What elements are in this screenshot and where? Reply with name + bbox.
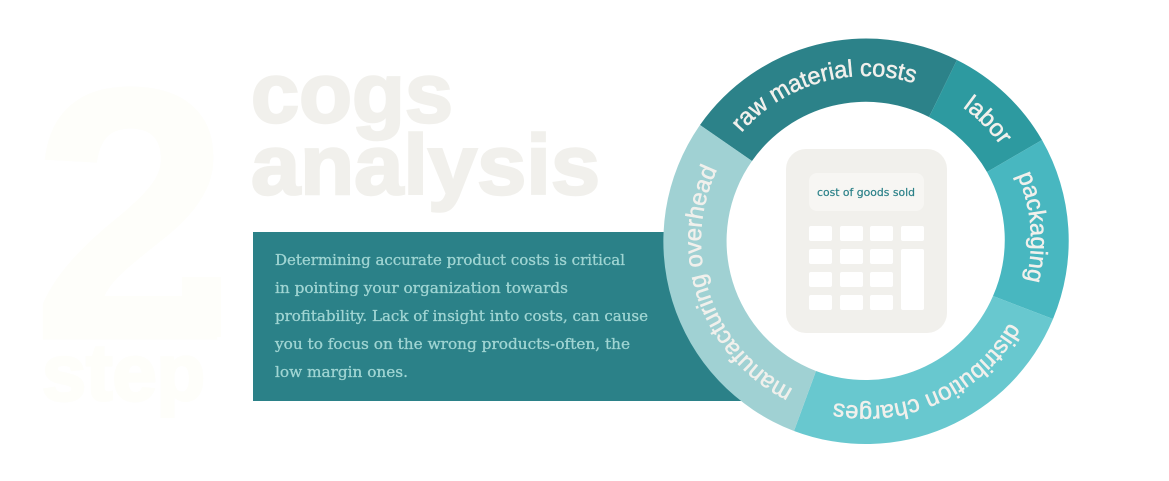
segment: labor <box>929 60 1042 172</box>
calculator keys <box>809 226 924 310</box>
description text: profitability. Lack of insight into costs, can cause <box>275 307 648 325</box>
step number watermark: 2 <box>32 14 230 414</box>
segment: distribution charges: distribution charges <box>833 324 1020 420</box>
segment: distribution charges <box>794 296 1053 444</box>
description text: you to focus on the wrong products-often, the <box>274 335 630 353</box>
title <box>251 46 600 212</box>
segment: manufacturing overhead <box>663 125 816 431</box>
calculator screen <box>809 173 924 211</box>
ring inner disc <box>726 101 1006 381</box>
segment: packaging <box>987 140 1069 319</box>
segment: raw material costs: raw material costs <box>732 59 916 132</box>
description text <box>274 251 648 381</box>
icon: calculator <box>786 149 947 333</box>
segment: raw material costs <box>700 38 957 161</box>
segment: packaging: packaging <box>1013 172 1048 282</box>
step number watermark: step <box>42 328 205 417</box>
segment: labor: labor <box>964 94 1011 142</box>
ring chart: cost components <box>663 38 1069 444</box>
segment: manufacturing overhead: manufacturing overhead <box>685 164 792 400</box>
panel: description <box>253 232 773 401</box>
description text: in pointing your organization towards <box>275 279 568 297</box>
calculator screen: cost of goods sold <box>817 186 915 199</box>
description text: low margin ones. <box>275 363 408 381</box>
title: analysis <box>251 118 600 212</box>
description text: Determining accurate product costs is critical <box>275 251 625 269</box>
title: cogs <box>251 46 453 140</box>
